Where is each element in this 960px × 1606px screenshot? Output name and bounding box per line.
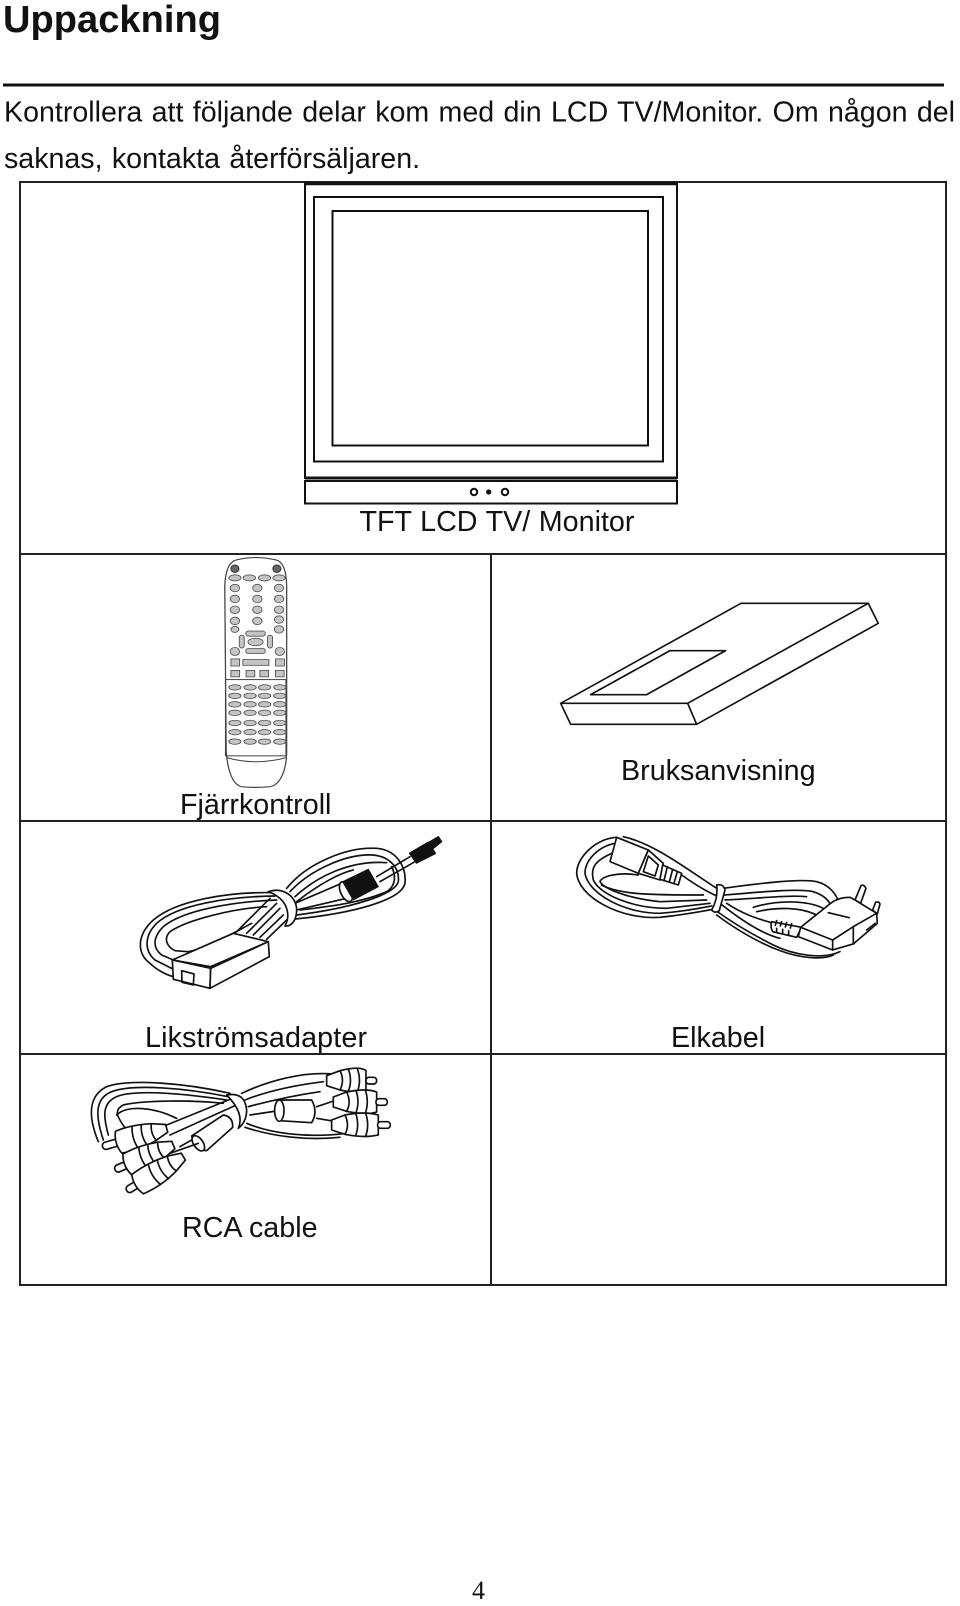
panel: DC adapter <box>140 837 442 1054</box>
icon: manual booklet <box>561 603 878 724</box>
icon: power cable <box>577 837 880 958</box>
page number: 4 <box>472 1576 485 1605</box>
label: TV: TFT LCD TV/ Monitor <box>360 506 635 538</box>
panel: manual <box>561 603 878 787</box>
panel: remote control <box>180 558 331 821</box>
panel: RCA cable <box>91 1068 390 1244</box>
label: RCA cable: RCA cable <box>182 1212 318 1244</box>
intro text <box>4 96 955 175</box>
icon: RCA cable <box>91 1068 390 1201</box>
label: power cable: Elkabel <box>671 1022 765 1054</box>
panel: TV <box>305 184 677 538</box>
intro text: Kontrollera att följande delar kom med din LCD TV/Monitor. Om någon del <box>4 96 955 128</box>
icon: remote control <box>225 558 287 787</box>
label: manual: Bruksanvisning <box>621 755 816 787</box>
icon: TV monitor <box>305 184 677 504</box>
label: DC adapter: Likströmsadapter <box>145 1022 367 1054</box>
icon: DC adapter cable <box>140 837 442 988</box>
label: remote control: Fjärrkontroll <box>180 789 331 821</box>
panel: power cable <box>577 837 880 1054</box>
panel: parts table <box>20 182 946 1285</box>
title: Uppackning <box>3 0 221 41</box>
intro text: saknas, kontakta återförsäljaren. <box>4 143 420 175</box>
